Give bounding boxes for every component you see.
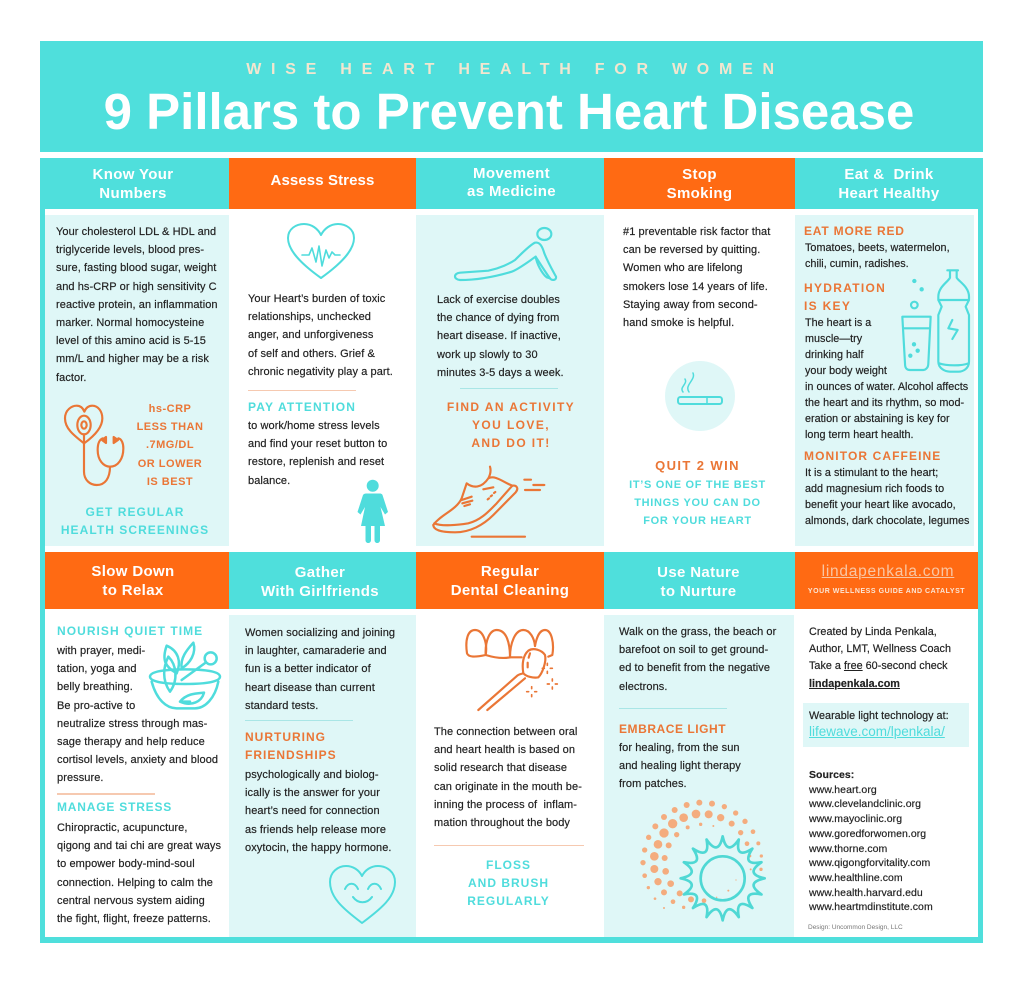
heading [416,158,604,209]
heading: With Girlfriends [261,582,379,600]
body text: restore, replenish and reset [248,456,384,468]
body text: Lack of exercise doubles [437,294,560,306]
body text [804,317,968,441]
body text: heart’s need for connection [245,805,380,817]
body text: The connection between oral [434,726,577,738]
subheading: hydration [804,281,886,313]
body text: marker. Normal homocysteine [56,317,204,329]
callout: hs-CRP: LESS THAN [137,421,203,433]
body text: can originate in the mouth be- [434,781,582,793]
tinted background [795,215,974,546]
body text: qigong and tai chi are great ways [57,840,221,852]
body text: level of this amino acid is 5-15 [56,335,206,347]
heading: Movement [473,165,550,182]
body text: reactive protein, an inflammation [56,299,218,311]
body text: barefoot on soil to get ground- [619,644,768,656]
body text: sage therapy and help reduce [57,736,205,748]
sources list: www.health.harvard.edu [809,887,923,899]
body text [619,739,741,794]
body text: in laughter, camaraderie and [245,645,387,657]
body text [805,242,950,270]
body text: tation, yoga and [57,663,137,675]
body text: your body weight [805,365,887,377]
body text: long term heart health. [805,429,914,441]
sources list: Sources: [809,769,854,781]
body text: belly breathing. [57,681,133,693]
subheading: eat more red: EAT MORE RED [804,224,905,238]
heading [604,552,795,609]
body text [434,726,582,829]
sources list: www.thorne.com [809,843,887,855]
body text: almonds, dark chocolate, legumes [805,515,969,527]
body text: smokers lose 14 years of life. [623,281,768,293]
body text [56,226,218,384]
callout: find an activity: YOU LOVE, [472,418,550,432]
body text: and find your reset button to [248,438,387,450]
body text: Be pro-active to [57,700,135,712]
heading: Regular [481,562,539,580]
body text: drinking half [805,349,863,361]
body text: electrons. [619,681,668,693]
callout: screenings [61,505,209,537]
subheading: nurturing friendships: NURTURING [245,730,326,744]
tinted background [416,215,604,546]
body text: cortisol levels, anxiety and blood [57,754,218,766]
body text: #1 preventable risk factor that [623,226,770,238]
body text [245,769,392,854]
heading [45,158,229,209]
body text: eration or abstaining is key for [805,413,950,425]
heading: Eat & Drink [844,166,934,183]
icon: running shoe [432,466,546,538]
callout: hs-CRP: hs-CRP [149,403,191,415]
body text [809,624,951,693]
tinted background [45,215,229,546]
callout: best things [629,479,766,527]
body text: heart disease. If inactive, [437,330,561,342]
callout: floss and brush: AND BRUSH [468,876,549,890]
heading: Numbers [99,185,167,202]
callout: best things: FOR YOUR HEART [643,515,752,527]
body text: mm/L and higher may be a risk [56,353,209,365]
body text: as friends help release more [245,824,386,836]
heading: Use Nature [657,564,740,580]
heading: Smoking [667,185,732,202]
icon: woman [358,480,388,543]
design credit: Design: Uncommon Design, LLC [808,924,903,931]
callout: screenings: HEALTH SCREENINGS [61,523,209,537]
callout: floss and brush: FLOSS [486,858,531,872]
body text: standard tests. [245,700,318,712]
subheading: nurturing friendships: FRIENDSHIPS [245,748,337,762]
body text [619,626,776,693]
subheading: pay attention: PAY ATTENTION [248,400,356,414]
website link: lindapenkala.com [822,563,954,580]
body text: Take a free 60-second check [809,660,948,672]
body text: fun is a better indicator of [245,663,371,675]
subheading: manage stress: MANAGE STRESS [57,800,172,814]
sources list: www.qigongforvitality.com [809,857,930,869]
body text: add magnesium rich foods to [805,483,944,495]
body text: Author, LMT, Wellness Coach [809,643,951,655]
body text: Women who are lifelong [623,262,743,274]
body text: relationships, unchecked [248,311,371,323]
body text: and heart health is based on [434,744,575,756]
body text: chronic negativity play a part. [248,366,393,378]
body text: lindapenkala.com [809,678,900,690]
body text: from patches. [619,778,687,790]
heading: Stop [682,166,717,183]
body text: factor. [56,372,87,384]
body text: balance. [248,475,290,487]
body text [248,293,393,378]
callout: find an activity: AND DO IT! [471,436,551,450]
body text: oxytocin, the happy hormone. [245,842,392,854]
panel: gather with girlfriends [229,552,416,937]
subheading: monitor caffeine: MONITOR CAFFEINE [804,449,941,463]
body text: pressure. [57,772,104,784]
sources list: www.heartmdinstitute.com [809,901,933,913]
body text: and hs-CRP or high sensitivity C [56,281,217,293]
body text: heart disease than current [245,682,375,694]
heading: Dental Cleaning [451,582,569,598]
icon: glass and bottle [901,269,970,373]
body text: benefit your heart like avocado, [805,499,956,511]
heading: Heart Healthy [838,185,940,202]
body text: neutralize stress through mas- [57,718,207,730]
heading: as Medicine [467,183,556,200]
body text: hand smoke is helpful. [623,317,734,329]
subheading: hydration: HYDRATION [804,281,886,295]
body text: Your cholesterol LDL & HDL and [56,226,216,238]
body text: work up slowly to 30 [437,349,538,361]
sources list [809,768,933,915]
callout: screenings: GET REGULAR [86,505,184,519]
body text: the fight, flight, freeze patterns. [57,913,211,925]
icon: smiling heart [329,865,396,924]
heading: Assess Stress [271,172,374,189]
body text: of self and others. Grief & [248,348,375,360]
callout: hs-CRP: OR LOWER [138,458,202,470]
body text: for healing, from the sun [619,742,740,754]
heading: Gather [295,564,345,580]
icon: cigarette [665,361,735,431]
sources list: www.healthline.com [809,872,903,884]
heading: Slow Down [91,562,175,580]
panel: use nature to nurture [604,552,795,937]
callout: hs-CRP [137,403,203,488]
heading: Know Your [93,166,173,183]
panel: stop smoking [604,158,795,527]
tinted background [604,615,794,937]
body text: Walk on the grass, the beach or [619,626,776,638]
panel: eat and drink heart healthy [795,166,974,546]
body text: and healing light therapy [619,760,741,772]
body text: Your Heart’s burden of toxic [248,293,385,305]
heading [795,158,978,209]
subheading: hydration: IS KEY [804,299,851,313]
subtitle: WISE HEART HEALTH FOR WOMEN [246,60,784,78]
callout: hs-CRP: IS BEST [147,476,193,488]
body text: sure, fasting blood sugar, weight [56,262,216,274]
panel: movement as medicine [416,165,604,546]
body text: Created by Linda Penkala, [809,626,937,638]
heading [604,158,795,209]
heading [795,552,978,609]
body text: chili, cumin, radishes. [805,258,909,270]
body text: solid research that disease [434,762,567,774]
panel: slow down to relax [45,552,229,925]
body text: triglyceride levels, blood pres- [56,244,204,256]
title: 9 Pillars to Prevent Heart Disease [104,83,914,140]
callout: best things: THINGS YOU CAN DO [634,497,761,509]
sources list: www.heart.org [809,784,877,796]
heading [229,552,416,609]
callout: wearable light [803,703,969,747]
body text [805,467,970,527]
tinted background [229,615,416,937]
heading: to Nurture [660,582,736,600]
white frame interior [45,209,978,937]
callout: find an activity [447,400,575,450]
body text: inning the process of inflam- [434,799,577,811]
body text: Chiropractic, acupuncture, [57,822,187,834]
body text: The heart is a [805,317,871,329]
callout: floss and brush [467,858,550,908]
heading: to Relax [102,582,164,598]
icon: mortar and herbs [148,641,222,710]
sources list: www.goredforwomen.org [809,828,926,840]
icon: stethoscope heart [64,404,124,486]
body text [56,645,218,784]
subheading: nurturing friendships [245,730,337,762]
title banner [40,41,983,152]
body text: muscle—try [805,333,862,345]
callout: hs-CRP: .7MG/DL [146,439,194,451]
callout: find an activity: FIND AN ACTIVITY [447,400,575,414]
body text: the chance of dying from [437,312,559,324]
body text: mation throughout the body [434,817,570,829]
body text: central nervous system aiding [57,895,205,907]
body text: psychologically and biolog- [245,769,379,781]
body text: with prayer, medi- [57,645,145,657]
heading [45,552,229,609]
body text: ically is the answer for your [245,787,380,799]
body text: Staying away from second- [623,299,758,311]
body text: Tomatoes, beets, watermelon, [805,242,950,254]
body text: the heart and its rhythm, so mod- [805,397,964,409]
body text: ed to benefit from the negative [619,662,770,674]
panel: about and sources [795,552,978,937]
heading [416,552,604,609]
sources list: www.clevelandclinic.org [809,798,921,810]
heading [229,158,416,209]
callout: quit 2 win: QUIT 2 WIN [655,458,740,473]
body text [436,294,564,379]
panel: assess stress [229,158,416,543]
tagline: YOUR WELLNESS GUIDE AND CATALYST [808,588,965,595]
sources list: www.mayoclinic.org [809,813,902,825]
body text [57,822,221,925]
body text: to work/home stress levels [248,420,380,432]
callout text: Wearable light technology at: [809,710,949,722]
body text [622,226,770,329]
teal frame [40,158,983,943]
callout: best things: IT’S ONE OF THE BEST [629,479,766,491]
body text: minutes 3-5 days a week. [437,367,564,379]
body text: in ounces of water. Alcohol affects [805,381,968,393]
subheading: embrace light: EMBRACE LIGHT [619,722,726,736]
panel: regular dental cleaning [416,552,604,908]
body text: anger, and unforgiveness [248,329,373,341]
icon: heart pulse [287,223,355,279]
link: lifewave.com/lpenkala/ [809,724,945,739]
body text: Women socializing and joining [245,627,395,639]
body text: can be reversed by quitting. [623,244,760,256]
icon: sun with dots [630,790,780,930]
body text: connection. Helping to calm the [57,877,213,889]
body text: It is a stimulant to the heart; [805,467,938,479]
panel: know your numbers [45,166,229,546]
subheading: nourish quiet time: NOURISH QUIET TIME [57,624,203,638]
body text [245,627,395,712]
body text [248,420,387,487]
icon: tooth and dental tool [465,628,558,712]
body text: to empower body-mind-soul [57,858,195,870]
icon: yoga pose [454,226,558,282]
callout: floss and brush: REGULARLY [467,894,550,908]
